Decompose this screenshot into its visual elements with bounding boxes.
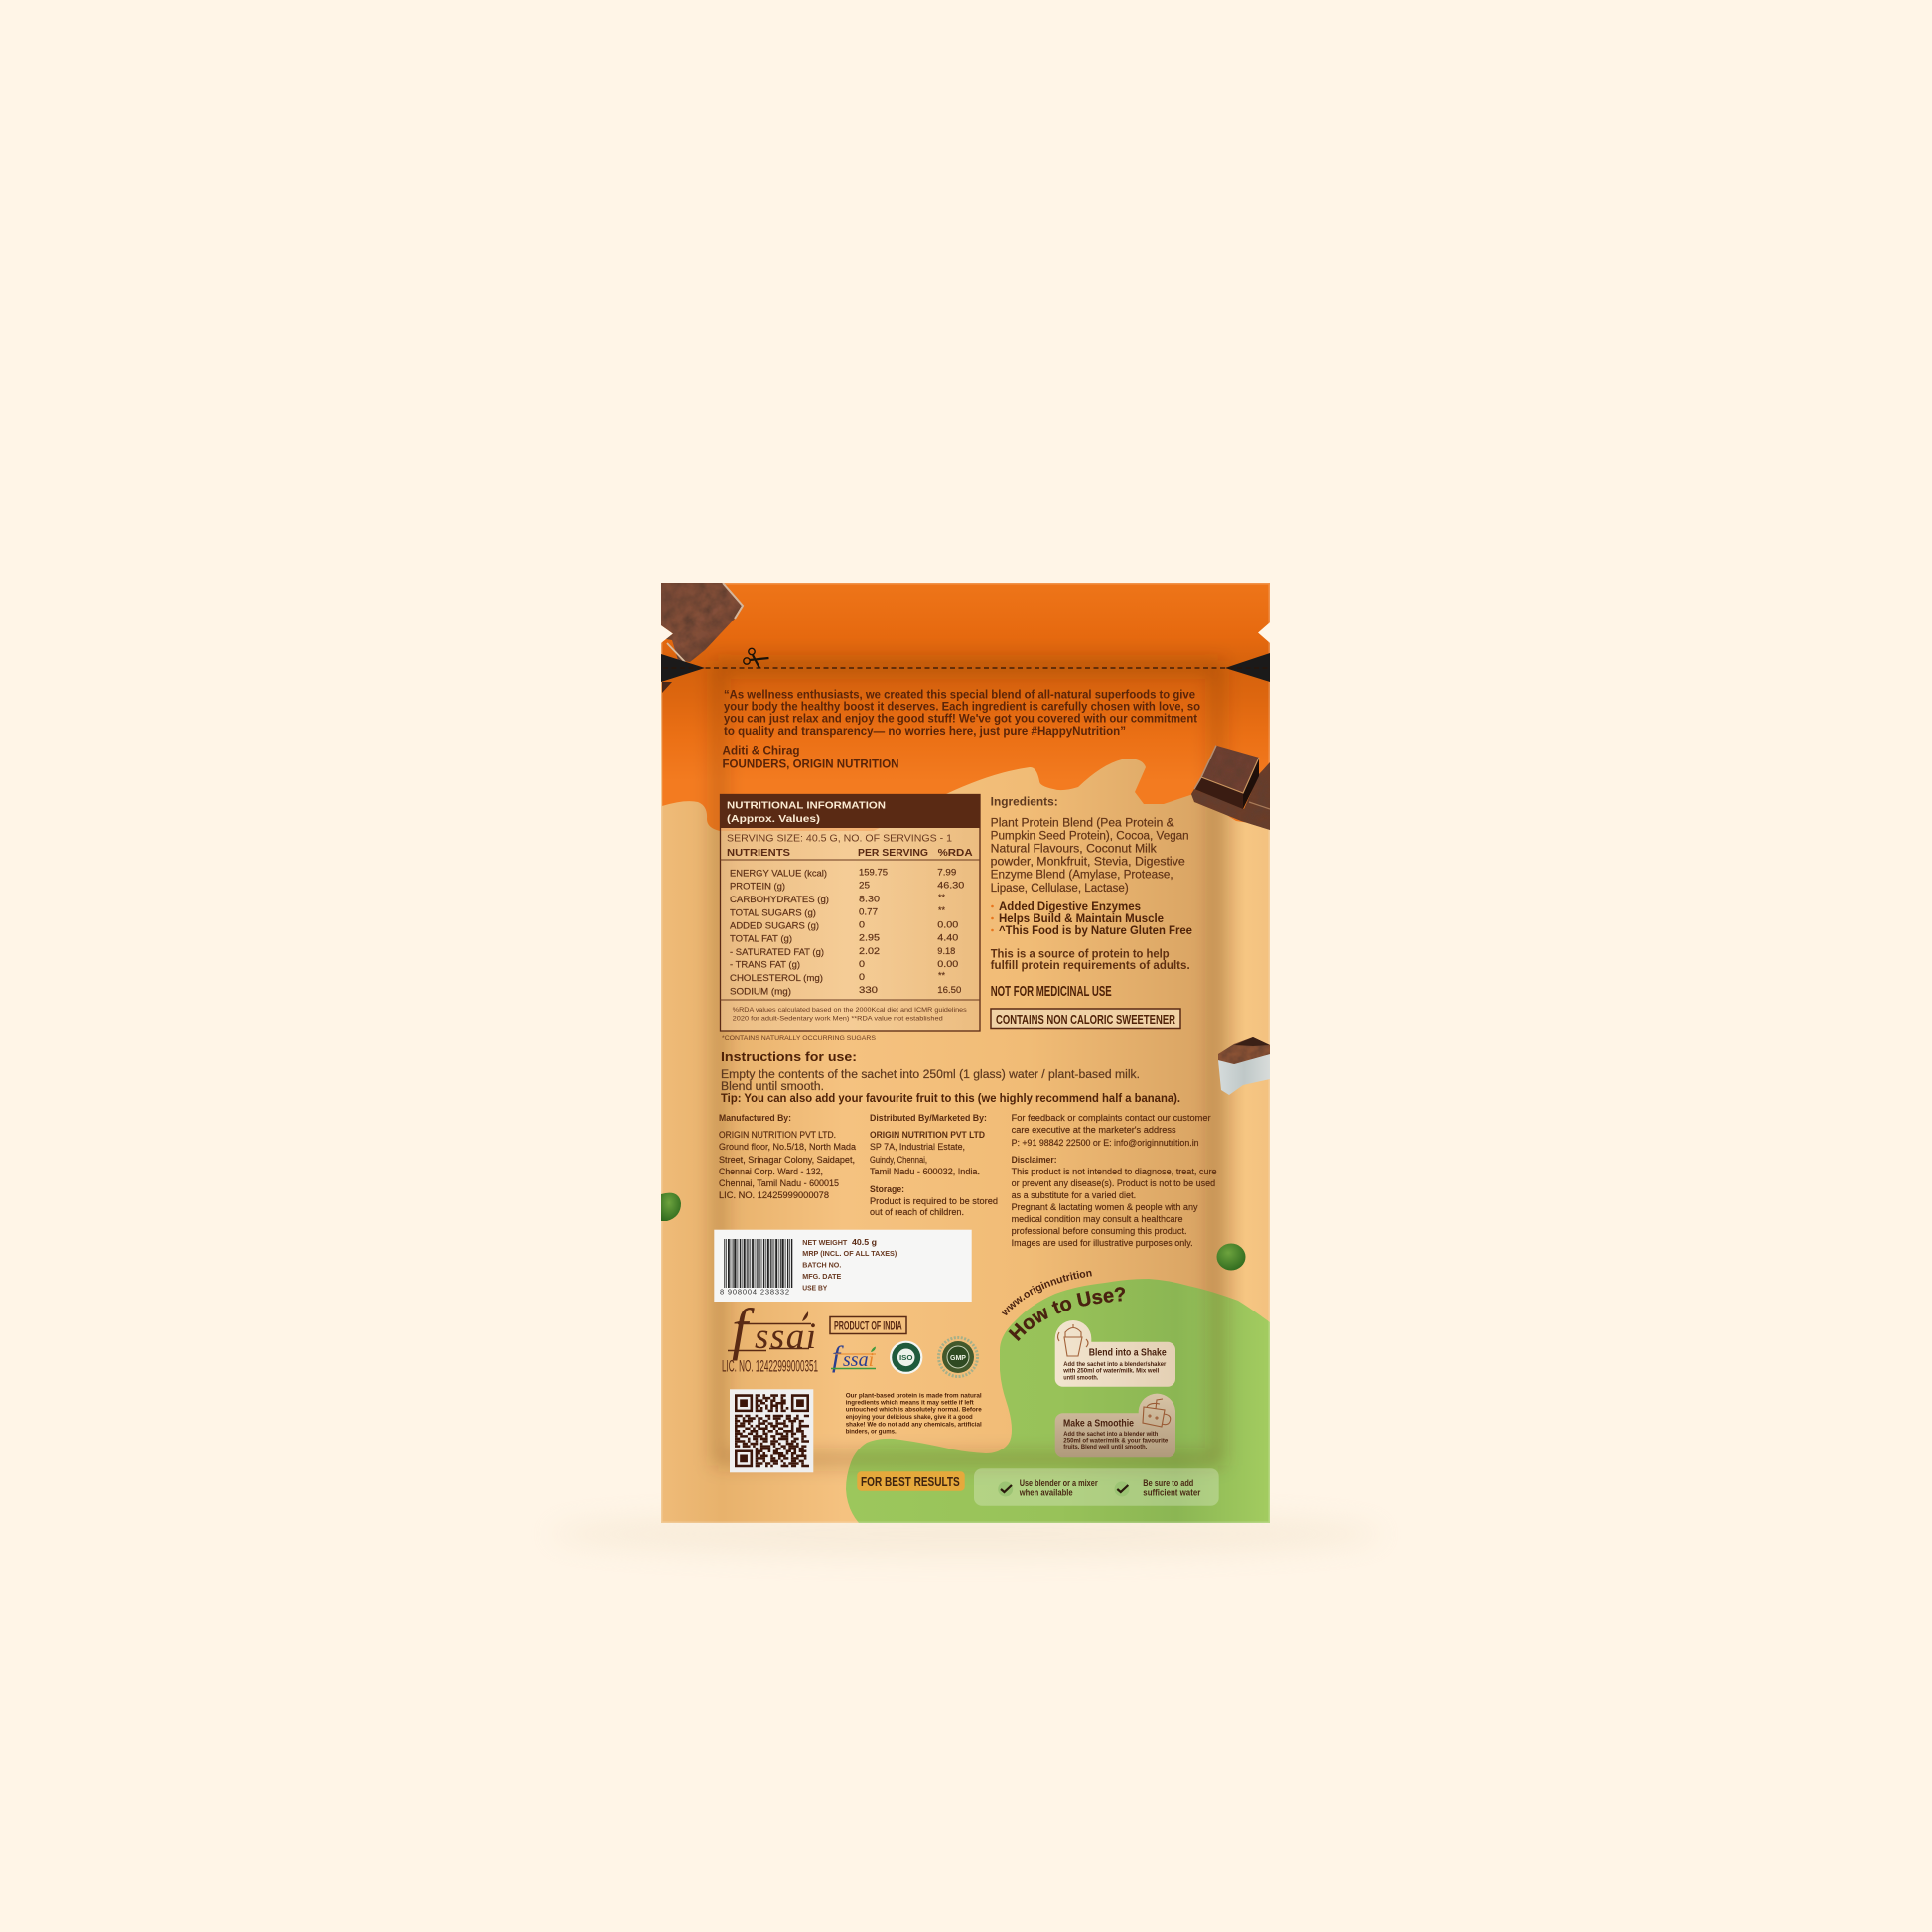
label fields — [802, 1238, 897, 1293]
feedback and disclaimer column: Images are used for illustrative purposes only. — [1012, 1238, 1193, 1248]
label fields: 40.5 g — [852, 1238, 877, 1247]
instructions: Tip: You can also add your favourite fruit to this (we highly recommend half a banana). — [721, 1093, 1180, 1105]
ingredients list: powder, Monkfruit, Stevia, Digestive — [991, 856, 1185, 868]
ground shadow — [549, 1512, 1383, 1556]
icon: check one — [998, 1481, 1013, 1497]
claims bullets: ^This Food is by Nature Gluten Free — [999, 925, 1192, 937]
table footnote — [733, 1007, 967, 1022]
nutrient rows: 4.40 — [937, 931, 958, 943]
distributor column: SP 7A, Industrial Estate, — [870, 1142, 965, 1152]
founders quote: you can just relax and enjoy the good stuff! We've got you covered with our commitment — [724, 713, 1197, 725]
feedback and disclaimer column: medical condition may consult a healthcare — [1012, 1214, 1183, 1224]
manufacturer column: LIC. NO. 12425999000078 — [719, 1190, 829, 1200]
label fields: USE BY — [802, 1284, 827, 1293]
nutrient rows: ADDED SUGARS (g) — [730, 919, 819, 930]
nutrient rows: - SATURATED FAT (g) — [730, 946, 824, 957]
black seal triangle right — [1225, 653, 1270, 682]
nutrient rows: SODIUM (mg) — [730, 985, 791, 996]
nutrient rows: ** — [938, 892, 945, 902]
icon: small fssai logo — [831, 1340, 876, 1373]
ingredients list: Enzyme Blend (Amylase, Protease, — [991, 870, 1173, 882]
distributor column: ORIGIN NUTRITION PVT LTD — [870, 1130, 985, 1140]
label fields: MRP (INCL. OF ALL TAXES) — [802, 1249, 897, 1258]
distributor column: Distributed By/Marketed By: — [870, 1113, 987, 1123]
nutrient rows — [730, 866, 964, 996]
nutrient rows: ** — [938, 904, 945, 915]
sweetener box: CONTAINS NON CALORIC SWEETENER — [996, 1012, 1175, 1027]
nutrient rows: - TRANS FAT (g) — [730, 959, 800, 970]
distributor column: Storage: — [870, 1184, 904, 1194]
card: make a smoothie: Add the sachet into a blender with — [1063, 1432, 1159, 1438]
founders quote: to quality and transparency— no worries here, just pure #HappyNutrition” — [724, 726, 1126, 738]
icon: ISO badge: ISO — [899, 1355, 913, 1362]
manufacturer column: Street, Srinagar Colony, Saidapet, — [719, 1155, 855, 1165]
nutrient rows: ENERGY VALUE (kcal) — [730, 867, 827, 878]
settling note: shake! We do not add any chemicals, artificial — [846, 1421, 982, 1428]
serving size: SERVING SIZE: 40.5 G, NO. OF SERVINGS - 1 — [727, 832, 952, 844]
panel: barcode label — [714, 1230, 972, 1302]
protein statement — [991, 948, 1190, 972]
column headings: PER SERVING — [858, 848, 928, 859]
card: blend into a shake — [1055, 1320, 1175, 1387]
claims bullets: Added Digestive Enzymes — [999, 901, 1141, 913]
nutrient rows: 0.77 — [859, 905, 878, 917]
nutrient rows: 0.00 — [937, 919, 958, 929]
icon: top-left chocolate piece — [661, 583, 743, 693]
label fields: BATCH NO. — [802, 1261, 841, 1270]
icon: shaker — [1058, 1324, 1088, 1356]
distributor column — [870, 1113, 998, 1217]
table header — [720, 794, 981, 828]
ingredients list: Lipase, Cellulase, Lactase) — [991, 883, 1129, 895]
feedback and disclaimer column: Pregnant & lactating women & people with any — [1012, 1202, 1198, 1212]
barcode — [720, 1263, 792, 1297]
ingredients list: Pumpkin Seed Protein), Cocoa, Vegan — [991, 830, 1189, 842]
protein statement: This is a source of protein to help — [991, 948, 1170, 960]
black seal triangle left — [661, 654, 705, 682]
nutrient rows: ** — [938, 969, 945, 981]
settling note: Our plant-based protein is made from natural — [846, 1392, 982, 1399]
sugars footnote: *CONTAINS NATURALLY OCCURRING SUGARS — [722, 1035, 877, 1042]
nutrient rows: 46.30 — [937, 880, 964, 890]
product of india box: PRODUCT OF INDIA — [834, 1320, 902, 1332]
icon: small fssai logo: ssa — [843, 1349, 869, 1371]
not for medicinal use: NOT FOR MEDICINAL USE — [991, 984, 1112, 1000]
website curved: www.originnutrition.in — [1001, 1271, 1092, 1315]
settling note: enjoying your delicious shake, give it a good — [846, 1414, 973, 1421]
settling note: untouched which is absolutely normal. Before — [846, 1407, 982, 1414]
text: LIC. NO. 12422999000351 — [722, 1356, 818, 1376]
tip one: when available — [1019, 1488, 1073, 1498]
edge highlights — [661, 584, 1269, 1523]
card: blend into a shake: Blend into a Shake — [1089, 1348, 1167, 1358]
distributor column: Guindy, Chennai, — [870, 1155, 927, 1165]
nutrient rows: 16.50 — [937, 984, 961, 995]
icon: GMP badge — [939, 1338, 977, 1376]
icon: ISO badge — [890, 1341, 922, 1374]
column headings: %RDA — [938, 848, 973, 859]
manufacturer column: Chennai, Tamil Nadu - 600015 — [719, 1178, 839, 1188]
founders quote: Aditi & Chirag — [723, 745, 800, 757]
tear line — [663, 667, 1268, 669]
claims bullets — [991, 901, 1192, 937]
instructions — [721, 1049, 1180, 1105]
card: make a smoothie: Make a Smoothie — [1063, 1418, 1134, 1430]
nutrient rows: 8.30 — [859, 894, 880, 903]
icon: fssai logo — [728, 1297, 818, 1361]
feedback and disclaimer column: or prevent any disease(s). Product is not to be used — [1012, 1178, 1215, 1188]
tip one: Use blender or a mixer — [1020, 1478, 1098, 1488]
founders quote: FOUNDERS, ORIGIN NUTRITION — [723, 759, 899, 770]
distributor column: Tamil Nadu - 600032, India. — [870, 1167, 980, 1176]
icon: GMP badge: GMP — [950, 1355, 966, 1362]
ingredients list: Plant Protein Blend (Pea Protein & — [991, 817, 1174, 829]
nutrient rows: 25 — [859, 880, 870, 890]
tip two — [1143, 1478, 1201, 1498]
feedback and disclaimer column: For feedback or complaints contact our customer — [1012, 1113, 1211, 1123]
distributor column: Product is required to be stored — [870, 1196, 998, 1206]
feedback and disclaimer column: professional before consuming this product. — [1012, 1226, 1187, 1236]
ingredients list — [991, 817, 1189, 895]
nutrient rows: PROTEIN (g) — [730, 881, 785, 892]
for best results badge — [857, 1471, 965, 1491]
barcode: 8 908004 238332 — [720, 1287, 789, 1297]
card: make a smoothie — [1055, 1394, 1175, 1457]
nutrient rows: 7.99 — [937, 866, 956, 878]
QR code — [730, 1389, 813, 1472]
card: make a smoothie: fruits. Blend well until smooth. — [1063, 1445, 1148, 1450]
protein statement: fulfill protein requirements of adults. — [991, 960, 1190, 972]
label fields: MFG. DATE — [802, 1272, 841, 1281]
tip two: sufficient water — [1143, 1488, 1201, 1498]
founders quote: your body the healthy boost it deserves. Each ingredient is carefully chosen with love, so — [724, 701, 1200, 713]
card: blend into a shake: until smooth. — [1063, 1375, 1099, 1381]
column headings: NUTRIENTS — [727, 848, 790, 859]
nutrient rows: 330 — [859, 984, 878, 995]
sweetener box — [991, 1009, 1180, 1029]
package fold shading — [719, 667, 1217, 1459]
settling note: ingredients which means it may settle if left — [846, 1399, 974, 1406]
card: blend into a shake: with 250ml of water/milk. Mix well — [1062, 1368, 1160, 1374]
nutrient rows: 0 — [859, 971, 865, 982]
feedback and disclaimer column: care executive at the marketer's address — [1012, 1125, 1176, 1135]
feedback and disclaimer column: Disclaimer: — [1012, 1155, 1057, 1165]
instructions: Instructions for use: — [721, 1049, 857, 1064]
label fields: NET WEIGHT — [802, 1238, 848, 1247]
icon: left pea — [661, 1193, 681, 1221]
icon: right chocolate piece — [1191, 746, 1270, 830]
tip one — [1019, 1478, 1098, 1498]
manufacturer column: Chennai Corp. Ward - 132, — [719, 1167, 823, 1176]
feedback and disclaimer column: This product is not intended to diagnose, treat, cure — [1012, 1167, 1217, 1176]
instructions: Empty the contents of the sachet into 250ml (1 glass) water / plant-based milk. — [721, 1069, 1140, 1081]
distributor column: out of reach of children. — [870, 1207, 964, 1217]
pouch — [661, 583, 1270, 1523]
nutrient rows: TOTAL SUGARS (g) — [730, 906, 816, 917]
icon: small fssai logo: f — [832, 1340, 844, 1373]
founders quote — [723, 689, 1200, 770]
best results tips bar — [974, 1468, 1219, 1506]
product of india box — [830, 1316, 906, 1334]
ingredients list: Natural Flavours, Coconut Milk — [991, 843, 1157, 855]
claims bullets: Helps Build & Maintain Muscle — [999, 913, 1164, 925]
nutrient rows: CARBOHYDRATES (g) — [730, 894, 829, 904]
feedback and disclaimer column — [1012, 1113, 1217, 1248]
table footnote: %RDA values calculated based on the 2000Kcal diet and ICMR guidelines — [733, 1007, 967, 1014]
for best results badge: FOR BEST RESULTS — [861, 1474, 960, 1489]
nutrient rows: 9.18 — [937, 945, 955, 956]
icon: fssai logo: ssai — [755, 1316, 818, 1357]
card: make a smoothie: 250ml of water/milk & your favourite — [1063, 1438, 1169, 1444]
panel: orange top with wave — [661, 583, 1270, 831]
nutrient rows: 0.00 — [937, 958, 958, 969]
icon: coconut chocolate piece — [1218, 1037, 1270, 1095]
instructions: Blend until smooth. — [721, 1081, 824, 1093]
settling note: binders, or gums. — [846, 1429, 897, 1436]
panel: green how-to-use area — [846, 1279, 1270, 1523]
feedback and disclaimer column: as a substitute for a varied diet. — [1012, 1190, 1136, 1200]
founders quote: “As wellness enthusiasts, we created this special blend of all-natural superfoods to give — [724, 689, 1195, 701]
panel: nutrition table — [720, 794, 981, 1031]
panel: nutrition table: (Approx. Values) — [727, 813, 820, 825]
icon: check two — [1114, 1481, 1130, 1497]
icon: right pea — [1217, 1243, 1245, 1271]
nutrient rows: CHOLESTEROL (mg) — [730, 972, 823, 983]
nutrient rows: TOTAL FAT (g) — [730, 933, 792, 944]
icon: scissors — [744, 648, 768, 668]
card: blend into a shake: Add the sachet into a blender/shaker — [1063, 1362, 1167, 1368]
manufacturer column: ORIGIN NUTRITION PVT LTD. — [719, 1130, 836, 1140]
manufacturer column: Ground floor, No.5/18, North Mada — [719, 1142, 856, 1152]
panel: nutrition table: NUTRITIONAL INFORMATION — [727, 800, 886, 812]
ingredients heading: Ingredients: — [991, 797, 1058, 809]
table footnote: 2020 for adult-Sedentary work Men) **RDA value not established — [733, 1015, 943, 1022]
tip two: Be sure to add — [1143, 1478, 1193, 1488]
settling note — [846, 1392, 982, 1436]
icon: mug — [1143, 1399, 1171, 1427]
manufacturer column — [719, 1113, 856, 1200]
panel: cream base — [661, 583, 1270, 1523]
icon: fssai logo: f — [732, 1297, 755, 1361]
nutrient rows: 2.95 — [859, 931, 880, 943]
column headings — [727, 848, 973, 859]
nutrient rows: 0 — [859, 919, 865, 929]
panel: ingredients — [991, 797, 1192, 1029]
how to use heading: How to Use? — [1009, 1287, 1125, 1341]
feedback and disclaimer column: P: +91 98842 22500 or E: info@originnutrition.in — [1012, 1138, 1199, 1148]
nutrient rows: 159.75 — [859, 866, 888, 878]
icon: small fssai logo: i — [869, 1349, 874, 1371]
nutrient rows: 0 — [859, 958, 865, 969]
nutrient rows: 2.02 — [859, 945, 880, 956]
manufacturer column: Manufactured By: — [719, 1113, 791, 1123]
